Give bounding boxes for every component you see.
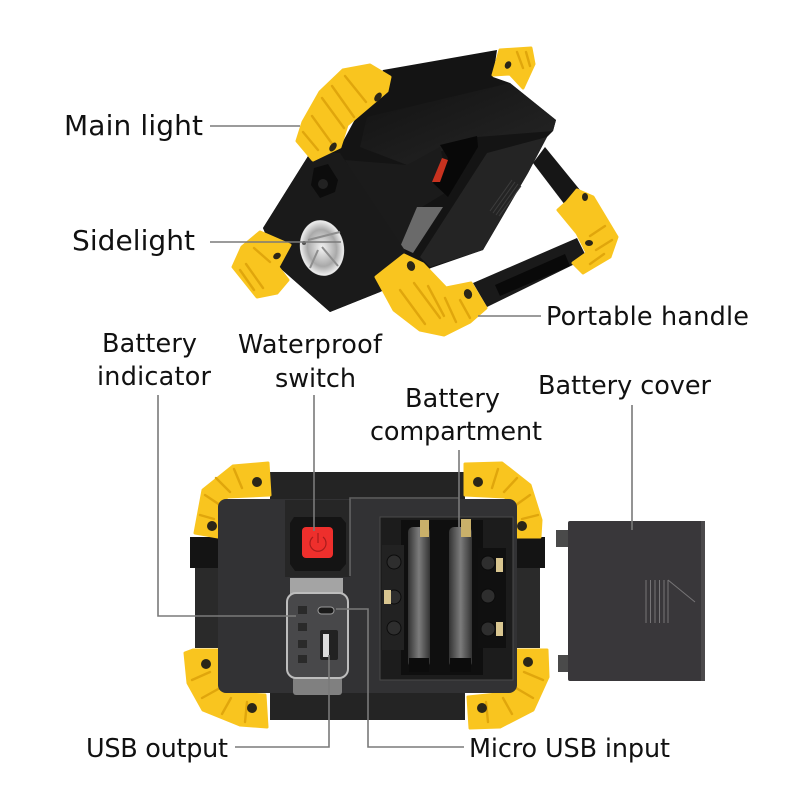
icon: side light lens [295, 217, 349, 279]
USB port [320, 630, 338, 660]
portable handle grip [473, 238, 587, 307]
icon: red power switch [302, 527, 333, 558]
product photo: work light, three-quarter view [233, 48, 617, 335]
label: battery cover: Battery cover [538, 371, 712, 401]
battery indicator LEDs [298, 606, 307, 663]
yellow corner: top right [493, 48, 534, 88]
yellow corner: bottom left [185, 650, 267, 727]
left end plate [263, 153, 406, 312]
yellow corner: top right [465, 463, 541, 537]
micro USB port [318, 607, 334, 614]
battery cover [556, 521, 705, 681]
battery compartment [380, 517, 513, 680]
main back panel [218, 499, 517, 693]
left side rail [190, 537, 218, 648]
label: battery indicator: Battery [102, 329, 197, 359]
switch notch [433, 136, 478, 197]
battery 2 [449, 527, 472, 667]
switch surround [285, 500, 350, 577]
label: portable handle: Portable handle [546, 302, 749, 332]
switch recess [290, 517, 346, 571]
yellow corner: top left [195, 463, 270, 537]
body front face [345, 147, 450, 247]
label: waterproof switch: Waterproof [238, 330, 383, 360]
label: battery compartment: Battery [405, 384, 500, 414]
label: sidelight: Sidelight [72, 224, 195, 257]
rear handle bar [533, 147, 580, 205]
springs [420, 520, 429, 537]
body rear face [420, 137, 547, 267]
yellow corner: handle right [558, 190, 617, 273]
icon: slide arrow [646, 580, 695, 623]
label: battery indicator: indicator [97, 362, 212, 392]
product photo: work light, rear view [185, 463, 548, 728]
label: battery indicator [97, 329, 212, 392]
clear cover edge [400, 207, 443, 253]
yellow corner: main light [297, 65, 390, 160]
speaker grille [490, 180, 521, 216]
label: waterproof switch [238, 330, 383, 394]
rear frame [270, 472, 465, 720]
label: main light: Main light [64, 109, 203, 142]
clear waterproof cover [287, 578, 348, 695]
gold contacts [384, 590, 391, 604]
label: waterproof switch: switch [275, 364, 356, 394]
label: battery compartment: compartment [370, 417, 542, 447]
red switch [432, 158, 448, 182]
contact column right [478, 548, 506, 648]
contact column left [382, 545, 404, 650]
label: battery compartment [370, 384, 542, 447]
battery ends [409, 658, 429, 672]
yellow corner: bottom right [468, 650, 548, 728]
yellow corner: sidelight base [233, 232, 290, 297]
label: USB output: USB output [86, 734, 228, 764]
right side rail [517, 537, 545, 648]
body silhouette [263, 50, 556, 312]
label: micro USB input: Micro USB input [469, 734, 670, 764]
knob [311, 164, 338, 198]
body top face [360, 83, 556, 165]
battery 1 [408, 527, 430, 667]
yellow corner: portable handle [376, 255, 486, 335]
leader lines [158, 126, 632, 747]
